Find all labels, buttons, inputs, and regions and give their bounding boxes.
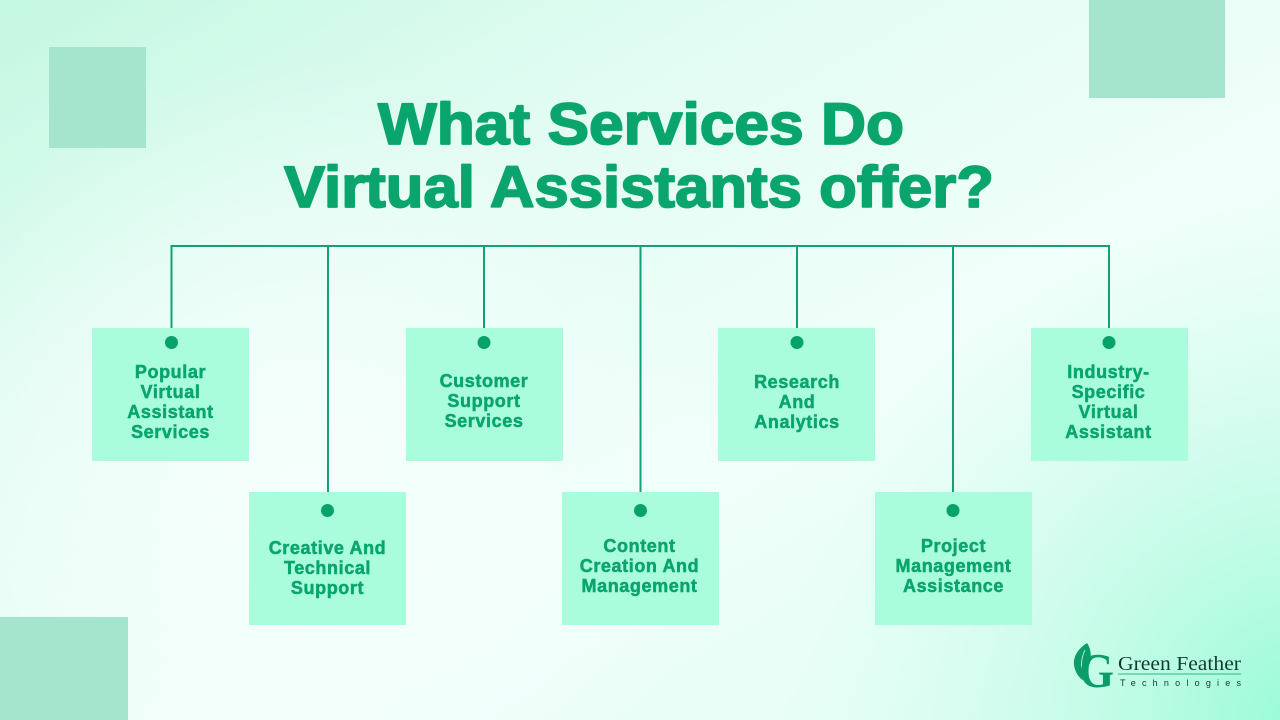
card: Popular Virtual Assistant Services: Assistant bbox=[127, 402, 214, 422]
card: Popular Virtual Assistant Services bbox=[92, 328, 249, 461]
card: Project Management Assistance: Project bbox=[921, 536, 986, 556]
card: Content Creation And Management bbox=[562, 492, 719, 625]
card: Popular Virtual Assistant Services: Virtual bbox=[141, 382, 200, 402]
logo tagline: Technologies bbox=[1120, 678, 1242, 688]
card: Customer Support Services: Services bbox=[445, 411, 523, 431]
decorative square: top right bbox=[1089, 0, 1225, 98]
card: Project Management Assistance: Assistance bbox=[903, 576, 1004, 596]
card: Creative And Technical Support: Support bbox=[291, 578, 364, 598]
card: Content Creation And Management: Content bbox=[603, 536, 676, 556]
card: Industry-Specific Virtual Assistant: Assistant bbox=[1065, 422, 1152, 442]
card: Research And Analytics bbox=[718, 328, 875, 461]
card: Popular Virtual Assistant Services: Popular bbox=[135, 362, 206, 382]
logo wordmark: Green Feather bbox=[1118, 654, 1242, 675]
decorative square: bottom left bbox=[0, 617, 128, 720]
card: Industry-Specific Virtual Assistant bbox=[1031, 328, 1188, 461]
card: Popular Virtual Assistant Services: Services bbox=[131, 422, 210, 442]
card: Industry-Specific Virtual Assistant: Specific bbox=[1072, 382, 1145, 402]
card: Creative And Technical Support: Creative And bbox=[269, 538, 386, 558]
card: Project Management Assistance bbox=[875, 492, 1032, 625]
title: What Services Do bbox=[378, 92, 904, 157]
icon: feather bbox=[1074, 643, 1091, 681]
title bbox=[284, 92, 994, 220]
title: Virtual Assistants offer? bbox=[284, 155, 994, 220]
connector lines bbox=[172, 246, 1109, 510]
card: Content Creation And Management: Management bbox=[581, 576, 698, 596]
card: Creative And Technical Support bbox=[249, 492, 406, 625]
card: Project Management Assistance: Management bbox=[895, 556, 1012, 576]
decorative square: top left bbox=[49, 47, 146, 148]
card: Research And Analytics: Analytics bbox=[754, 412, 840, 432]
card: Content Creation And Management: Creation And bbox=[580, 556, 699, 576]
card: Research And Analytics: And bbox=[779, 392, 815, 412]
card: Industry-Specific Virtual Assistant: Industry- bbox=[1067, 362, 1150, 382]
card: Customer Support Services: Support bbox=[447, 391, 521, 411]
card: Creative And Technical Support: Technical bbox=[284, 558, 371, 578]
logo: Green Feather Technologies bbox=[1074, 643, 1242, 698]
card: Customer Support Services: Customer bbox=[440, 371, 528, 391]
card: Industry-Specific Virtual Assistant: Virtual bbox=[1079, 402, 1138, 422]
logo letter G: G bbox=[1079, 643, 1114, 698]
card: Customer Support Services bbox=[406, 328, 563, 461]
card: Research And Analytics: Research bbox=[754, 372, 840, 392]
